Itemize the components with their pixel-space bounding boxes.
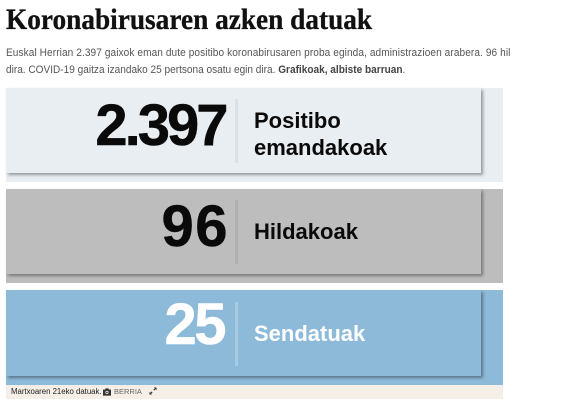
label: deaths: Hildakoak (254, 219, 358, 244)
card: deaths (6, 189, 481, 274)
label: positive cases: emandakoak (254, 135, 387, 160)
label: positive cases: Positibo (254, 108, 341, 133)
number: recovered: 25 (164, 292, 224, 357)
separator (235, 200, 238, 264)
separator (235, 302, 238, 366)
separator (235, 99, 238, 163)
intro text: dira. COVID-19 gaitza izandako 25 pertsona osatu egin dira. Grafikoak, albiste barruan. (6, 64, 405, 76)
number: deaths: 96 (161, 194, 229, 259)
intro text: Euskal Herrian 2.397 gaixok eman dute positibo koronabirusaren proba eginda, administrazioen arabera. 96 hil (6, 47, 510, 59)
panel: recovered (6, 290, 503, 385)
footer (6, 385, 503, 399)
icon: camera (103, 388, 111, 396)
title: Koronabirusaren azken datuak (6, 3, 372, 36)
source note: Martxoaren 21eko datuak. (11, 387, 102, 396)
icon: expand arrows (149, 388, 157, 394)
card: recovered (6, 290, 481, 376)
number: positive cases: 2.397 (95, 93, 226, 158)
panel: positive cases (6, 88, 503, 182)
intro text (6, 47, 510, 76)
label: recovered: Sendatuak (254, 321, 365, 346)
panel: deaths (6, 189, 503, 283)
card: positive cases (6, 88, 481, 173)
credit: BERRIA (114, 387, 142, 396)
label: positive cases (254, 108, 388, 160)
